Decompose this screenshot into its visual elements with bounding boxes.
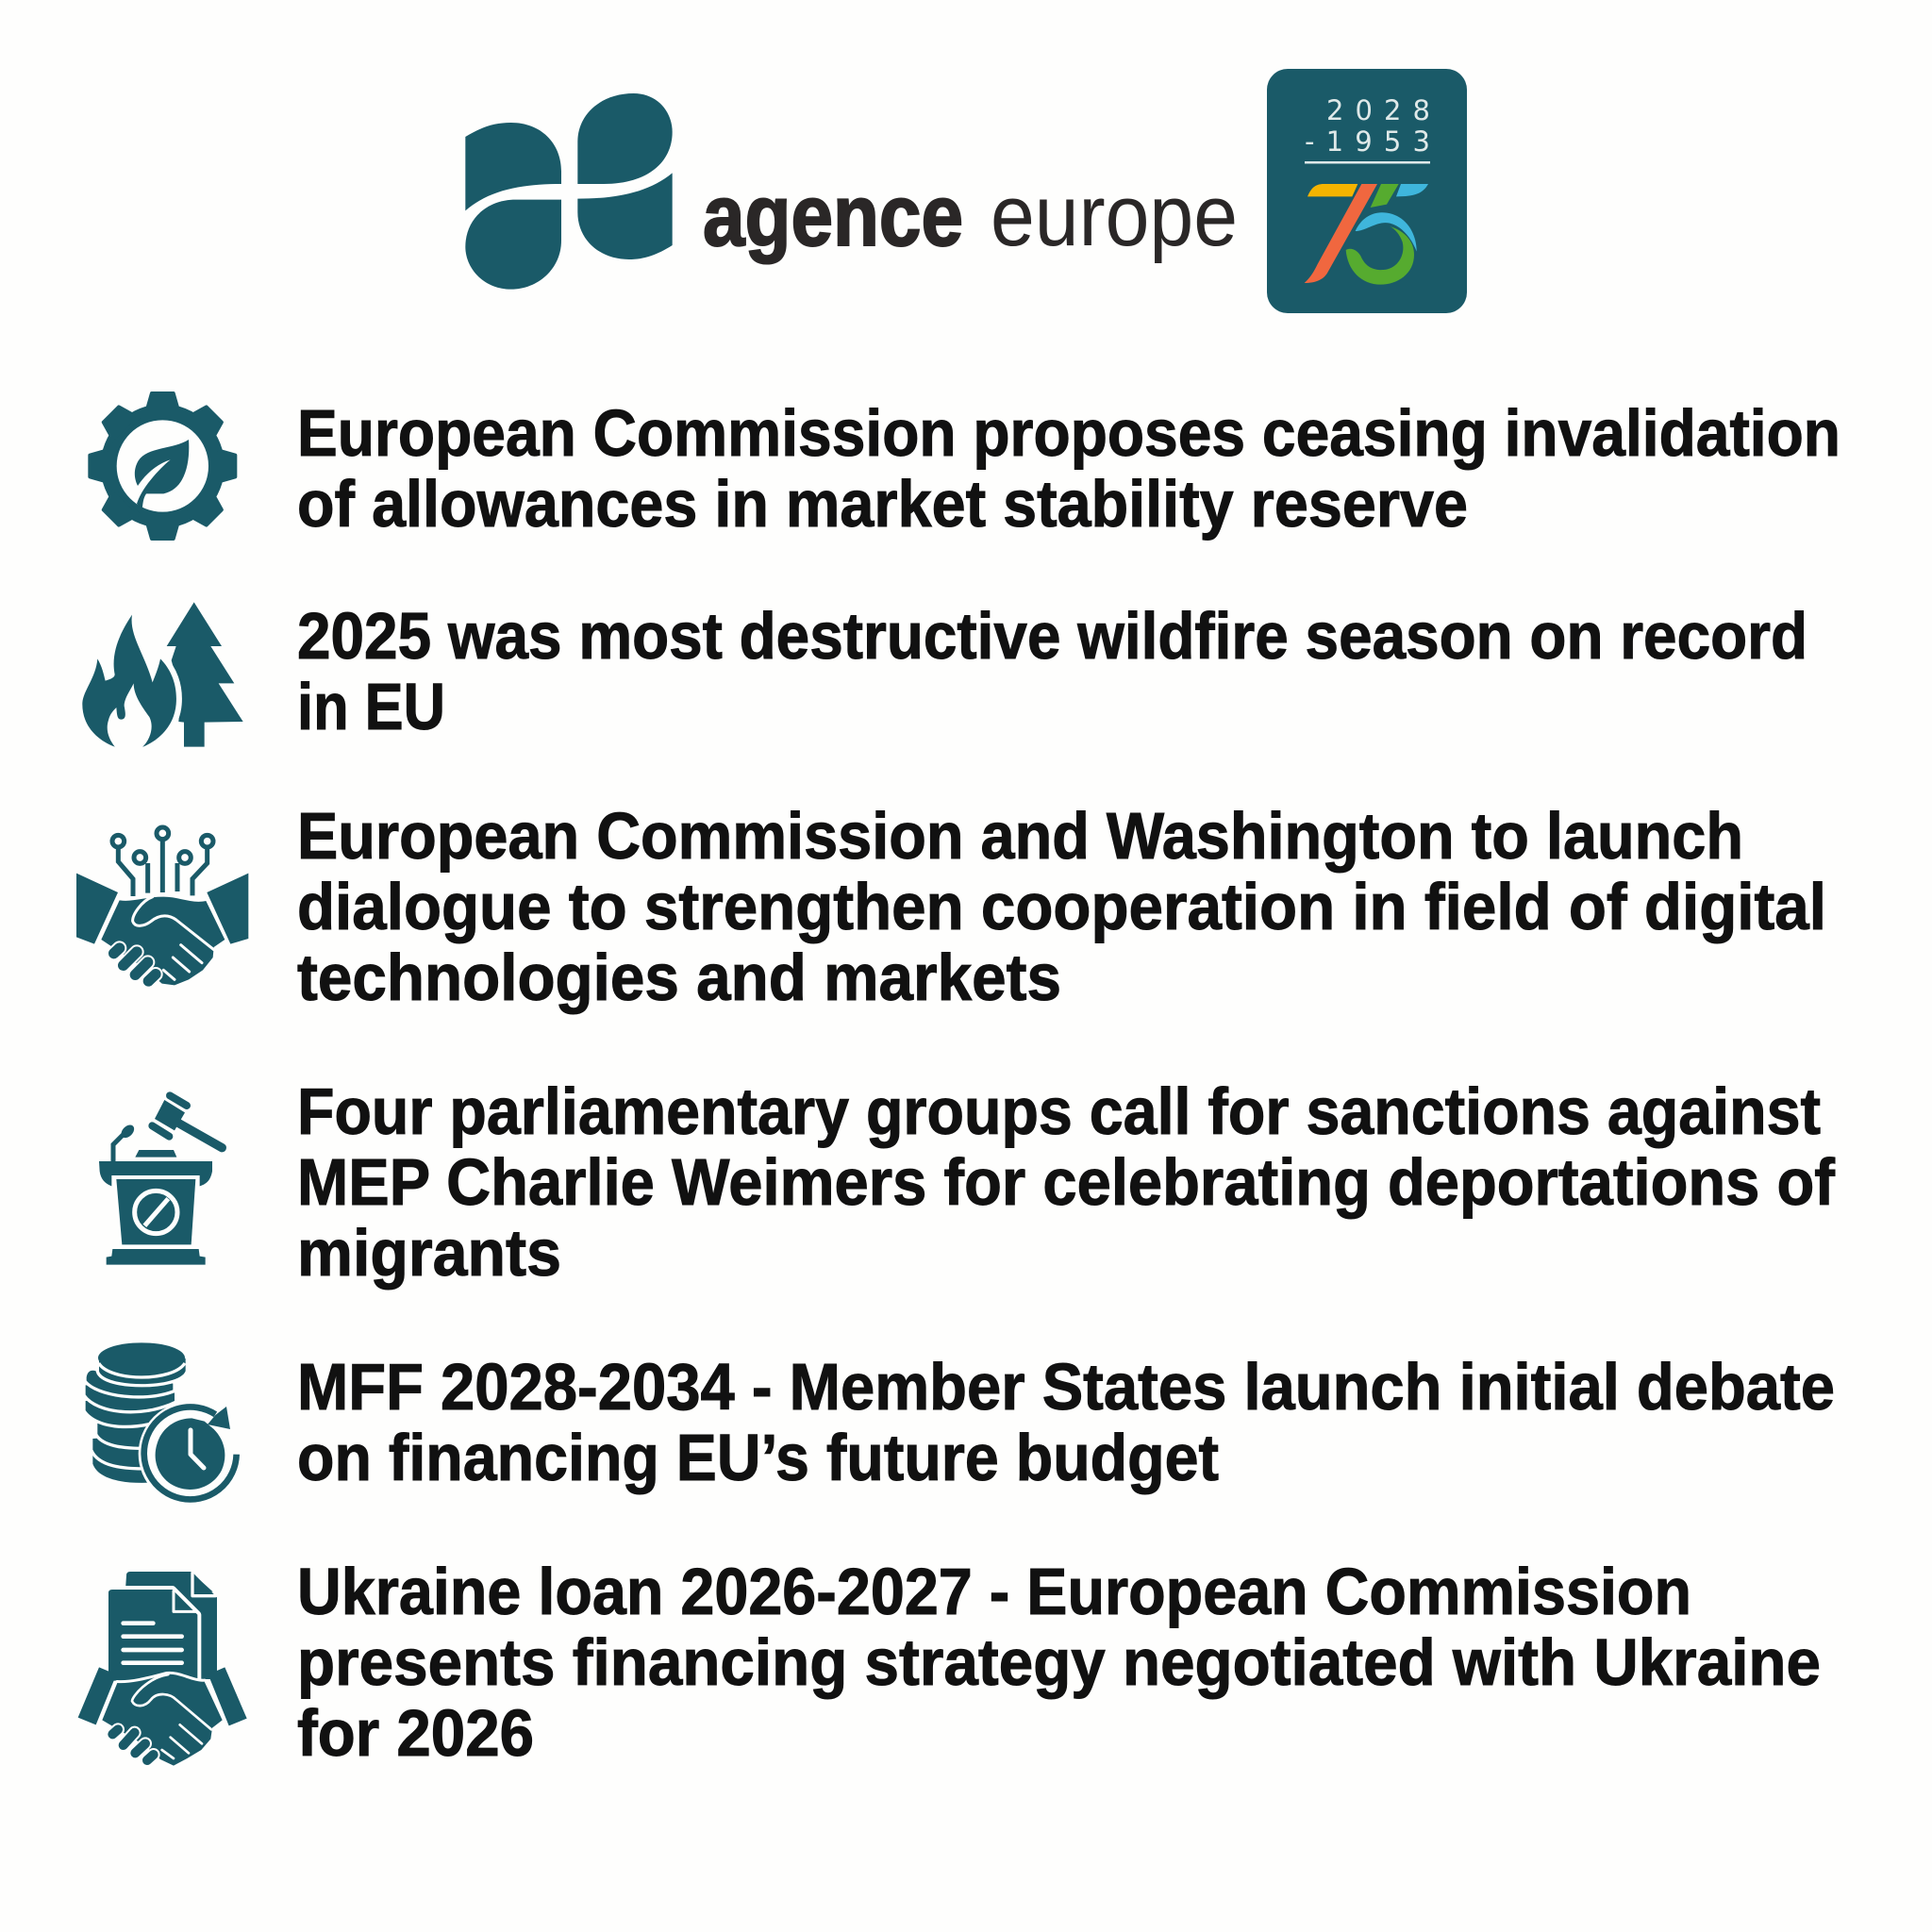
headline 1: European Commission proposes ceasing invalidation	[297, 396, 1840, 470]
headline 3: dialogue to strengthen cooperation in field of digital	[297, 870, 1826, 943]
badge: 75 years	[1267, 69, 1467, 313]
icon: documents and handshake	[78, 1572, 247, 1766]
wordmark: agence	[703, 168, 963, 264]
logo: agence europe	[465, 93, 1238, 290]
icon: handshake with circuit lines	[76, 827, 248, 985]
icon: gavel and lectern	[99, 1095, 222, 1265]
headline 6: for 2026	[297, 1696, 534, 1770]
headline 2: in EU	[297, 670, 445, 743]
headline 4: MEP Charlie Weimers for celebrating deportations of	[297, 1145, 1836, 1219]
icon: flame and tree	[82, 602, 243, 747]
headline 3	[297, 799, 1826, 1014]
badge years: 2028	[1326, 94, 1430, 126]
headline 5: on financing EU’s future budget	[297, 1421, 1219, 1494]
headline 6	[297, 1555, 1821, 1770]
headline 6: presents financing strategy negotiated with Ukraine	[297, 1625, 1821, 1699]
headline 4	[297, 1074, 1836, 1290]
headline 2: 2025 was most destructive wildfire season on record	[297, 599, 1807, 673]
headline 2	[297, 599, 1807, 743]
headline 4: Four parliamentary groups call for sanctions against	[297, 1074, 1821, 1148]
headline 4: migrants	[297, 1216, 561, 1290]
headline 1: of allowances in market stability reserve	[297, 467, 1468, 541]
headline 5: MFF 2028-2034 - Member States launch initial debate	[297, 1350, 1835, 1424]
headline 6: Ukraine loan 2026-2027 - European Commission	[297, 1555, 1691, 1628]
headline 3: technologies and markets	[297, 941, 1061, 1014]
headline 5	[297, 1350, 1835, 1494]
wordmark: europe	[991, 168, 1238, 264]
headline 3: European Commission and Washington to launch	[297, 799, 1743, 873]
badge years: -1953	[1305, 125, 1430, 158]
icon: coins and clock	[86, 1342, 242, 1506]
badge 75 mark	[1305, 184, 1428, 285]
icon: agence europe mark	[465, 93, 673, 290]
headline 1	[297, 396, 1840, 541]
badge years	[1305, 94, 1430, 158]
icon: gear with leaf	[90, 393, 236, 539]
